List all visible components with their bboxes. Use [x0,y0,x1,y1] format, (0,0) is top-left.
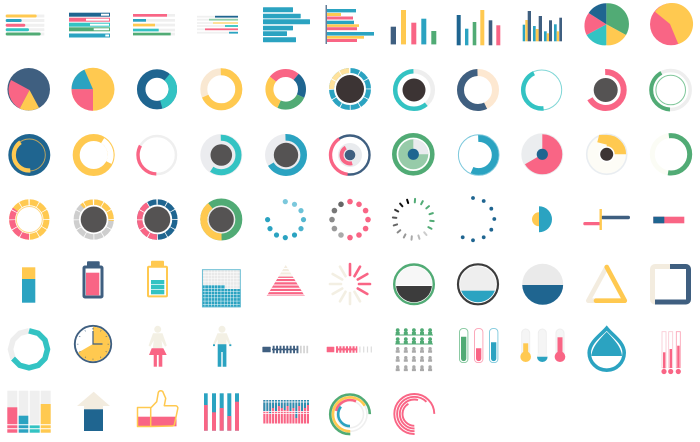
person: man [213,326,231,367]
horizontal bar chart [263,7,310,42]
pie chart: five slices [584,3,629,45]
thermometers [520,329,565,362]
striped pyramid [266,264,306,297]
grouped column chart [523,11,562,41]
ring: pink on grey [138,136,176,174]
person: woman [149,326,167,367]
vertical bar chart [391,10,436,44]
thumbs up gauge [138,391,178,426]
donut: slate on cream [460,72,496,108]
level gauge: green ring, dark fill [394,264,434,306]
half circles: teal and yellow [532,206,552,232]
water drop gauge [589,328,624,370]
loader: radial ticks [393,199,434,240]
progress bars: outlined [69,13,110,37]
sector dial: yellow on ivory [587,134,627,174]
progress bars: grey tracks [6,14,44,36]
level gauge: blue half [522,264,564,305]
segmented ring: pink and yellow [12,202,47,237]
gauge: turquoise on grey disc [200,134,242,176]
triangle gauge [588,267,625,301]
gauge: pink with grey centre [588,72,624,108]
battery: pink [84,261,102,297]
donut: yellow on cream [204,72,239,107]
six column bar chart [457,10,500,45]
battery: yellow with turquoise cells [148,261,167,296]
test tubes [460,329,498,363]
progress bars: slim [133,14,175,35]
pictogram grid: people [395,330,433,370]
ring: green arc [652,136,690,173]
gauge: teal on grey disc [265,134,307,176]
sector dial: pink on grey [521,133,563,175]
progress bar: blue and pink [653,217,684,223]
ring: teal with thin outline [458,135,499,175]
loader: pink and grey dots [329,199,371,240]
progress bars: right aligned [197,16,238,34]
donut: blue and turquoise [141,74,173,105]
loader: teal dots [265,199,306,240]
concentric rings: pink [394,394,434,434]
waffle grid chart [202,269,241,307]
segmented gauge: dark centre [331,70,369,108]
ring: yellow with outlined gap [73,135,114,175]
stacked vertical bars [204,393,239,431]
dial: slate and pink [330,136,370,174]
pie chart: half yellow [72,68,114,111]
gauge: turquoise with dark centre [395,71,433,109]
donut: four segments [269,73,302,106]
ring: turquoise thick and thin [522,70,562,110]
level block: teal and yellow [22,267,35,303]
segmented gauge: blue and pink [139,202,175,237]
gauge: green and yellow [204,202,239,237]
polygon ring gauge [10,331,48,368]
grouped horizontal bar chart [326,5,374,44]
clock [75,326,111,362]
segmented gauge: yellow and grey [76,202,111,237]
dial: green with sector [394,135,432,173]
dial: blue with yellow arc [8,134,50,176]
level gauge: dark ring, teal fill [458,264,498,311]
slim thermometers [661,332,681,374]
square gauge [652,266,688,302]
pie chart: slate, pink, yellow [7,68,50,111]
ring: green with inner outline [651,70,690,110]
house arrow [77,392,110,431]
loader: spokes [330,264,370,304]
pictogram bar: pink [327,347,374,352]
pictogram bar: slate [262,347,310,352]
loader: blue dots [461,196,496,242]
pie chart: two slices [650,3,693,45]
concentric rings: multi-colour [330,394,370,434]
waffle strip chart [263,400,309,424]
stacked column chart [7,391,51,433]
diverging bar [583,209,630,230]
